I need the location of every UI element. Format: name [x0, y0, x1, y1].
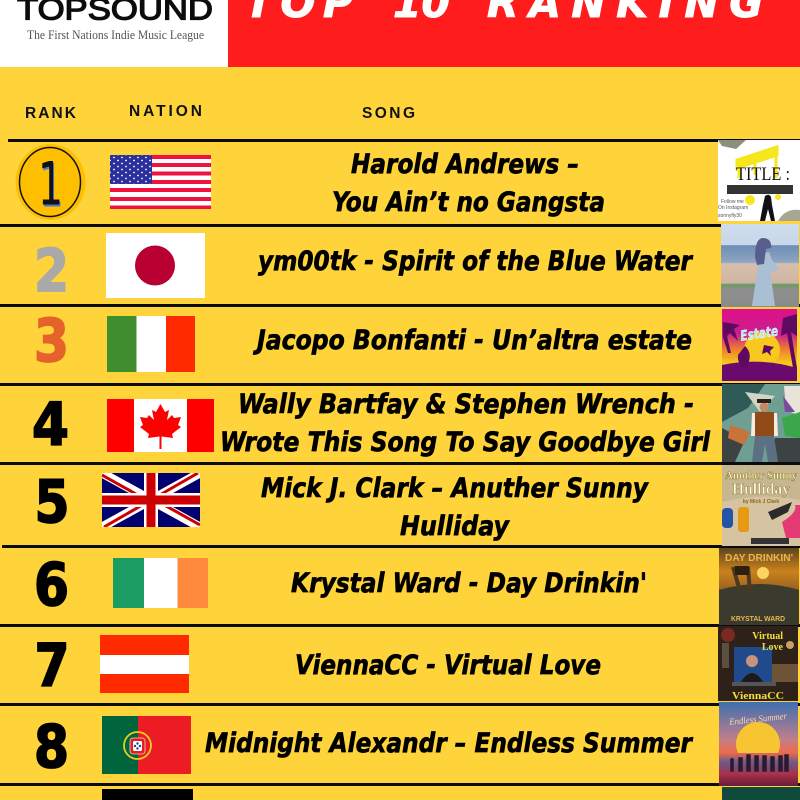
- album cover 2: [721, 224, 799, 307]
- album cover 5: [722, 465, 800, 546]
- flag: row 9 black band: [102, 789, 193, 800]
- rank 2: 2: [34, 236, 69, 305]
- album cover 8: Endless Summer: [728, 712, 788, 728]
- song: Wally Bartfay: Wrote This Song To Say Goodbye Girl: [220, 427, 711, 458]
- album cover 1: Follow me: [721, 199, 744, 205]
- song: Midnight Alexandr: Midnight Alexandr – Endless Summer: [205, 728, 693, 759]
- header: title banner: [228, 0, 800, 67]
- song: Harold Andrews: Harold Andrews –: [351, 149, 579, 180]
- song: Wally Bartfay: [220, 389, 711, 458]
- rank 7: 7: [34, 631, 70, 700]
- song: Mick J. Clark: Hulliday: [400, 511, 510, 542]
- album cover 3: [722, 309, 797, 381]
- album cover 6: KRYSTAL WARD: [731, 616, 785, 623]
- flag: Canada: [107, 399, 214, 452]
- cover title: Estate: [739, 324, 779, 345]
- logo tagline: The First Nations Indie Music League: [27, 28, 204, 42]
- album cover 5: by Mick J Clark: [743, 499, 779, 505]
- column heading: rank: RANK: [25, 105, 77, 122]
- flag: Japan: [106, 233, 205, 298]
- flag: Portugal: [102, 716, 191, 774]
- album cover 5: Hulliday: [732, 481, 790, 498]
- album cover 7: Love: [762, 642, 784, 653]
- rank 1 medal: 1: [39, 152, 64, 222]
- column heading: song: SONG: [362, 105, 415, 122]
- song: ym00tk: ym00tk - Spirit of the Blue Water: [258, 246, 693, 277]
- album cover 6: DAY DRINKIN': [725, 552, 793, 564]
- song: ViennaCC: ViennaCC - Virtual Love: [295, 650, 601, 681]
- song: Mick J. Clark: [261, 473, 649, 542]
- rank 3: 3: [34, 306, 69, 375]
- album cover 7: Virtual: [752, 631, 783, 642]
- rank 5: 5: [34, 467, 70, 536]
- rank 8: 8: [34, 712, 69, 781]
- song: Wally Bartfay: Wally Bartfay & Stephen Wrench -: [238, 389, 694, 420]
- song: Harold Andrews: [332, 149, 605, 218]
- song: Krystal Ward: Krystal Ward - Day Drinkin': [291, 568, 647, 599]
- album cover 7: [718, 626, 798, 702]
- album cover 1: [718, 140, 800, 221]
- rank 1 medal: [16, 144, 86, 222]
- flag: USA: [110, 155, 211, 209]
- flag: Austria: [100, 635, 189, 693]
- flag: Italy: [107, 316, 195, 372]
- album cover 6: [719, 548, 799, 625]
- album cover 7: ViennaCC: [732, 691, 784, 702]
- album cover 4: [722, 384, 800, 462]
- album cover 1: sonnyfly30: [718, 213, 742, 219]
- album cover 9: [722, 787, 800, 800]
- flag: Ireland: [113, 558, 208, 608]
- header: logo panel: [0, 0, 228, 67]
- album cover 1: TITLE :: [736, 164, 790, 185]
- column heading: nation: NATION: [129, 103, 202, 120]
- album cover 8: [719, 702, 798, 786]
- song: Mick J. Clark: Mick J. Clark – Anuther Sunny: [261, 473, 649, 504]
- rank 1 digit: 1: [38, 150, 63, 220]
- album cover 5: Another Sunny: [725, 470, 797, 482]
- flag: UK: [102, 473, 200, 527]
- album cover 1: On Instagram: [718, 205, 748, 211]
- rank 6: 6: [34, 550, 69, 619]
- rank 4: 4: [32, 390, 69, 459]
- song: Jacopo Bonfanti: Jacopo Bonfanti - Un’altra estate: [253, 325, 692, 356]
- song: Harold Andrews: You Ain’t no Gangsta: [332, 187, 605, 218]
